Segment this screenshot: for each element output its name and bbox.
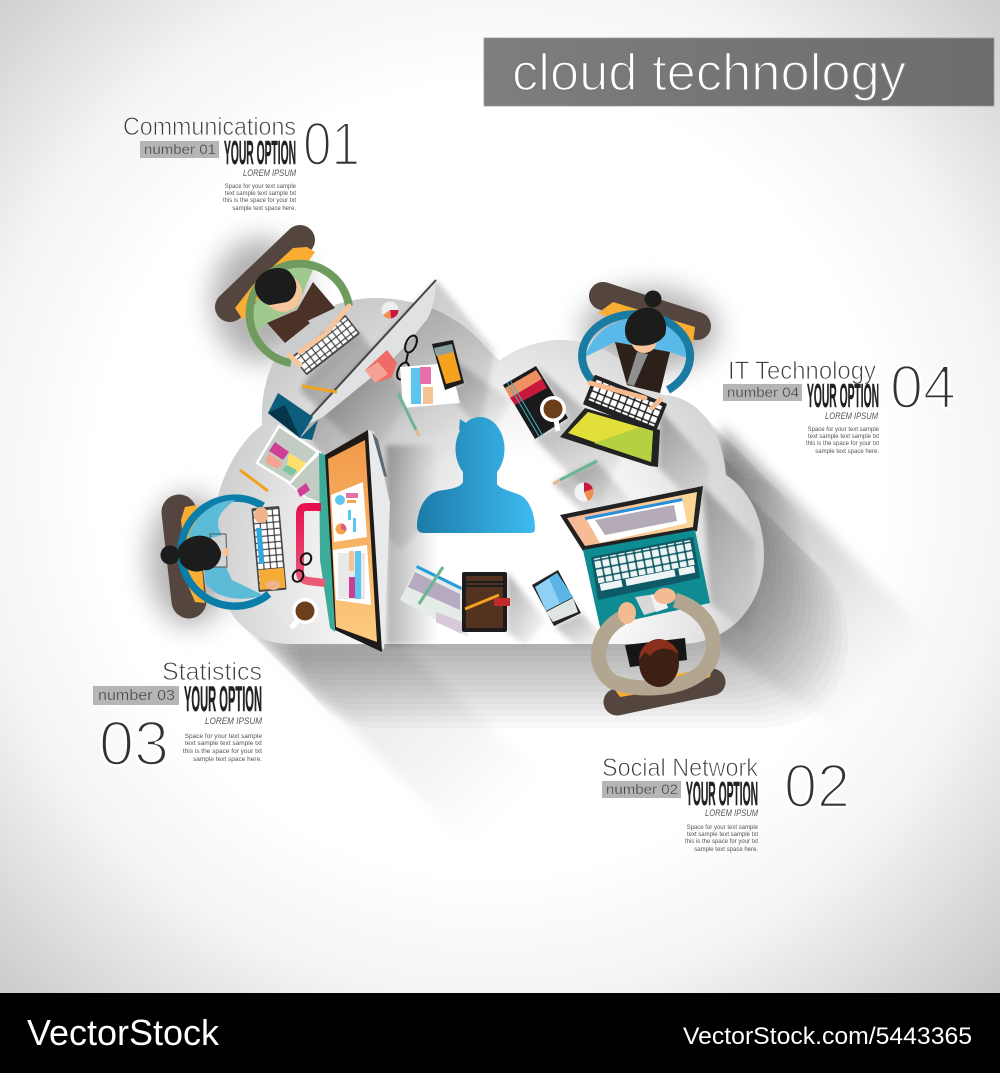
callout 04: IT technology: number 04 bbox=[727, 384, 799, 400]
person 2: body bbox=[598, 588, 713, 702]
callout 01: communications: LOREM IPSUM bbox=[243, 168, 296, 178]
callout 04: IT technology: IT Technology bbox=[728, 357, 876, 385]
callout 03: statistics: LOREM IPSUM bbox=[205, 716, 262, 727]
callout 01: communications: this is the space for your txt bbox=[223, 198, 296, 204]
phone blue bbox=[532, 570, 581, 626]
callout 03: statistics: this is the space for your txt bbox=[183, 748, 262, 755]
callout 03: statistics: text sample text sample txt bbox=[185, 740, 262, 747]
title banner: cloud technology bbox=[512, 44, 906, 102]
callout 01: communications bbox=[123, 110, 360, 212]
callout 01: communications: number 01 bbox=[144, 141, 216, 157]
callout 01: communications: sample text space here. bbox=[232, 206, 296, 212]
person 3: left bbox=[160, 498, 287, 606]
callout 01: communications: text sample text sample txt bbox=[225, 191, 296, 197]
keyboard bbox=[251, 506, 287, 592]
person 4: top right bbox=[560, 290, 697, 467]
screen card 1 bbox=[331, 482, 367, 542]
callout 04: IT technology: LOREM IPSUM bbox=[825, 411, 878, 421]
blue person silhouette bbox=[417, 417, 535, 533]
callout 02: social network: 02 bbox=[784, 752, 850, 820]
keyboard bbox=[292, 315, 360, 375]
long shadow bands bbox=[222, 425, 960, 860]
callout 04: IT technology: text sample text sample txt bbox=[808, 434, 879, 440]
cloud bbox=[212, 298, 764, 644]
callout 04: IT technology: Space for your text sample bbox=[808, 427, 880, 433]
callout 02: social network: this is the space for your txt bbox=[685, 839, 758, 845]
glasses left bbox=[291, 551, 313, 584]
callout 04: IT technology: sample text space here. bbox=[815, 449, 879, 455]
callout 03: statistics: Statistics bbox=[162, 658, 262, 686]
text: YOUR OPTION bbox=[184, 680, 262, 719]
tablet bbox=[462, 572, 510, 632]
monitor: diagonal blade with stand bbox=[268, 280, 436, 440]
newspaper bbox=[257, 426, 320, 503]
pie chart small bbox=[382, 302, 399, 319]
callout 04: IT technology: 04 bbox=[890, 353, 956, 421]
callout 02: social network bbox=[602, 752, 850, 853]
footer bar bbox=[0, 993, 1000, 1073]
person halos bbox=[148, 238, 718, 626]
callout 01: communications: YOUR OPTION bbox=[224, 134, 296, 171]
laptop screen bbox=[560, 408, 660, 467]
callout 03: statistics: Space for your text sample bbox=[185, 733, 262, 740]
title banner bbox=[484, 38, 994, 106]
paper with pencil bottom bbox=[400, 565, 468, 637]
footer bar: VectorStock.com/5443365 bbox=[683, 1023, 972, 1050]
paper with bars bbox=[400, 363, 460, 408]
callout 04: IT technology bbox=[723, 353, 956, 455]
book bbox=[503, 366, 568, 439]
callout 02: social network: LOREM IPSUM bbox=[705, 808, 758, 818]
person 2: laptop bbox=[560, 486, 710, 627]
callout 04: IT technology: this is the space for your txt bbox=[806, 441, 879, 447]
callout 01: communications: Space for your text sample bbox=[225, 184, 297, 190]
laptop keyboard bbox=[583, 375, 667, 433]
stand red bbox=[300, 507, 325, 583]
callout 03: statistics bbox=[93, 658, 262, 779]
coffee right bbox=[540, 396, 566, 431]
glasses top bbox=[395, 334, 419, 381]
person 1: top-left bbox=[230, 240, 360, 375]
callout 01: communications: Communications bbox=[123, 113, 296, 141]
callout 02: social network: Social Network bbox=[602, 754, 758, 782]
device long shadows bbox=[300, 280, 755, 645]
callout 03: statistics: sample text space here. bbox=[193, 756, 262, 763]
callout 02: social network: text sample text sample txt bbox=[687, 832, 758, 838]
callout 02: social network: sample text space here. bbox=[694, 847, 758, 853]
screen card 2 bbox=[333, 545, 371, 605]
callout 03: statistics: 03 bbox=[99, 709, 169, 779]
phone orange bbox=[432, 340, 464, 390]
callout 02: social network: number 02 bbox=[606, 781, 678, 797]
pencils bbox=[240, 386, 597, 491]
large monitor bbox=[319, 430, 390, 652]
pie chart right bbox=[574, 482, 594, 502]
footer bar: VectorStock bbox=[27, 1012, 220, 1053]
callout 01: communications: 01 bbox=[303, 110, 360, 178]
callout 02: social network: YOUR OPTION bbox=[686, 775, 758, 812]
coffee left bbox=[291, 598, 318, 628]
callout 03: statistics: number 03 bbox=[98, 687, 175, 704]
long shadow of cloud bbox=[218, 304, 848, 728]
callout 02: social network: Space for your text sample bbox=[687, 825, 759, 831]
